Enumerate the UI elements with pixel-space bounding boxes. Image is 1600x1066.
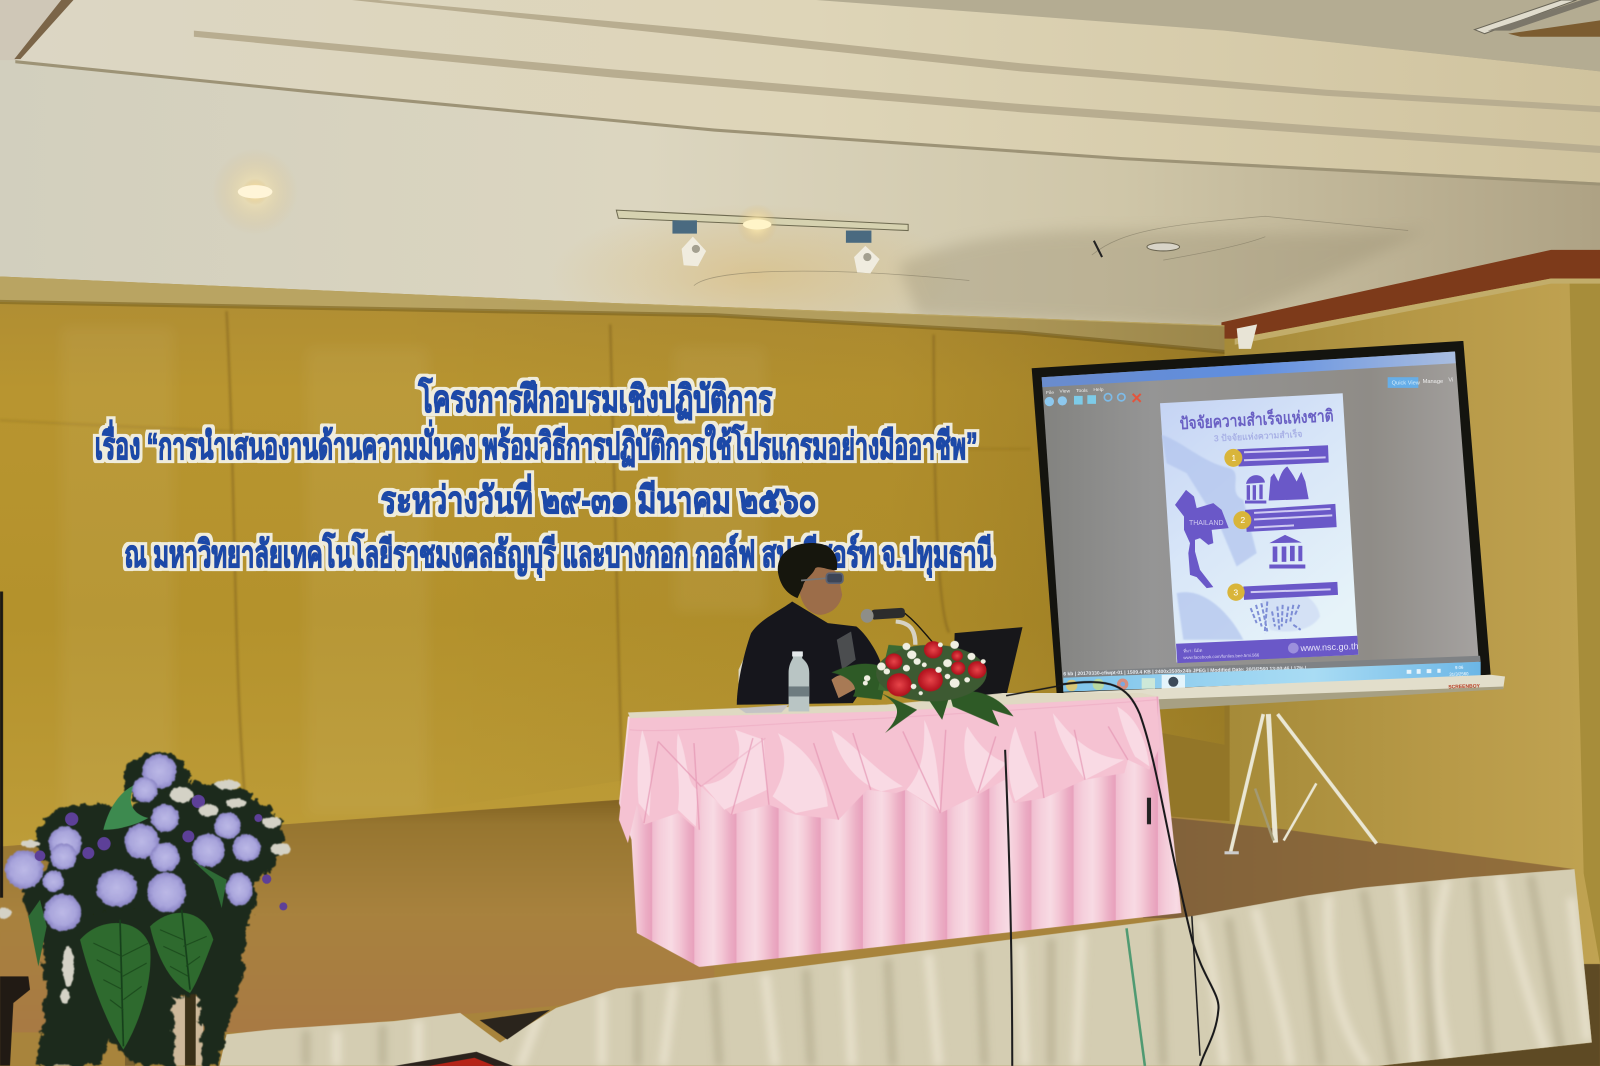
- pedestal: [50, 953, 203, 1066]
- back wall and stage floor: [0, 796, 714, 1032]
- poster footer: www.nsc.go.th: [1299, 641, 1359, 653]
- callout 3: 3: [1233, 587, 1238, 597]
- small purple flowers: [35, 795, 287, 910]
- poster title: ปัจจัยความสำเร็จแห่งชาติ: [1179, 404, 1334, 433]
- fern fronds: [28, 785, 227, 1050]
- warm light wash: [551, 204, 959, 347]
- laptop cable: [1006, 686, 1061, 696]
- baby's breath: [863, 641, 986, 695]
- toolbar icons: Tools: [1076, 388, 1088, 394]
- taskbar: [1063, 662, 1481, 692]
- ceiling stains: [694, 216, 1408, 286]
- poster footer: ที่มา: นิมิต: [1183, 647, 1203, 653]
- track lights: [616, 204, 1180, 273]
- status bar: 6 kb | 20170330-cfiwpt-01 | 1509.4 KB | 2400x3508x24b JPEG | Modified Date: 30/3/2560 13:00:46 | 17% |: [1063, 666, 1307, 677]
- banner line 2: เรื่อง “การนำเสนองานด้านความมั่นคง พร้อมวิธีการปฏิบัติการใช้โปรแกรมอย่างมืออาชีพ”: [95, 419, 978, 467]
- foliage: [23, 753, 283, 1066]
- power cable left: [1005, 750, 1012, 1066]
- skirt folds: [306, 875, 1588, 1066]
- foliage mass: [876, 645, 987, 701]
- banner text: [95, 377, 993, 578]
- table top: [628, 693, 1158, 721]
- banner line 1: โครงการฝึกอบรมเชิงปฏิบัติการ: [418, 377, 773, 420]
- ceiling spot lamp: [212, 149, 298, 235]
- callout 3: [1227, 582, 1338, 601]
- glasses: [801, 573, 843, 583]
- icon: parliament building: [1269, 535, 1305, 568]
- gap in skirt: [480, 1010, 550, 1039]
- right wall: [1153, 250, 1600, 969]
- papers and mouse: [739, 705, 789, 713]
- toolbar icons: File: [1046, 390, 1054, 396]
- toolbar icons: Vi: [1448, 378, 1453, 384]
- table cloth: [610, 696, 1199, 973]
- callout 2: [1233, 504, 1337, 532]
- face: [799, 565, 842, 615]
- presenter: [737, 543, 880, 705]
- hair: [778, 543, 837, 598]
- side table: [0, 976, 30, 1066]
- projected desktop: [1042, 352, 1480, 691]
- projector data cable: [1061, 682, 1219, 1066]
- left edge dark strip: [0, 592, 3, 898]
- power cable right: [1192, 916, 1200, 1056]
- toolbar icons: Manage: [1423, 379, 1443, 385]
- banner line 4: ณ มหาวิทยาลัยเทคโนโลยีราชมงคลธัญบุรี และบางกอก กอล์ฟ สปารีสอร์ท จ.ปทุมธานี: [124, 532, 993, 578]
- presenter, table and flowers: [610, 543, 1199, 973]
- icon: government buildings: [1245, 467, 1309, 504]
- poster footer: [1176, 636, 1359, 663]
- window title bar: [1042, 352, 1456, 387]
- toolbar icons: [1045, 377, 1453, 406]
- poster subtitle: 3 ปัจจัยแห่งความสำเร็จ: [1213, 427, 1303, 444]
- water bottle: [789, 651, 809, 711]
- white blossoms: [0, 780, 291, 1004]
- small plug: [1147, 798, 1151, 824]
- tripod stand: [1224, 714, 1377, 853]
- status bar: [1063, 656, 1481, 678]
- banner line 3: ระหว่างวันที่ ๒๙-๓๑ มีนาคม ๒๕๖๐: [381, 473, 816, 521]
- hydrangea blooms: [5, 754, 261, 931]
- fern leaves: [831, 645, 1014, 733]
- taskbar: 31/3/2560: [1449, 671, 1469, 677]
- floor object bottom: [394, 1052, 513, 1066]
- taskbar: 9:06: [1455, 665, 1464, 670]
- screen frame: [1032, 341, 1491, 694]
- ceiling stepped bands: [15, 0, 1600, 183]
- poster background map: [1162, 435, 1320, 640]
- laptop: [953, 627, 1022, 696]
- swag folds: [630, 700, 1156, 830]
- toolbar icons: Help: [1093, 387, 1104, 393]
- left flower stand: [0, 753, 291, 1066]
- stage skirt: [204, 857, 1600, 1066]
- stage floor right of table: [1143, 816, 1574, 918]
- poster footer: www.facebook.com/funlies.bee.5mi.566: [1183, 652, 1260, 660]
- microphone stand: [861, 608, 935, 645]
- dark floor lower right: [1378, 964, 1600, 1066]
- table swags: [619, 696, 1160, 843]
- green cable: [1127, 928, 1145, 1066]
- ceiling vent: [1474, 0, 1600, 37]
- infographic poster on screen: [1160, 393, 1359, 663]
- chair: [739, 658, 744, 703]
- callout 1: 1: [1231, 453, 1236, 463]
- swag highlights: [638, 706, 1149, 826]
- banner backdrop: [0, 276, 1224, 847]
- screen case: [1063, 675, 1505, 710]
- ceiling: [0, 0, 1600, 347]
- body: [737, 601, 880, 705]
- callout 1: [1224, 445, 1329, 467]
- flower arrangement: [831, 641, 1014, 733]
- recessed fitting: [1147, 243, 1180, 251]
- map: Thailand: THAILAND: [1189, 520, 1224, 527]
- red carnations: [885, 641, 986, 696]
- hands: [831, 675, 860, 698]
- toolbar icons: View: [1059, 389, 1070, 395]
- icon: crowd: [1251, 601, 1301, 633]
- projector screen: [1032, 341, 1505, 710]
- callout 2: 2: [1240, 515, 1245, 525]
- screen case: SCREENBOY: [1448, 683, 1481, 690]
- map: Thailand: [1175, 490, 1229, 588]
- toolbar icons: Quick View: [1392, 381, 1421, 387]
